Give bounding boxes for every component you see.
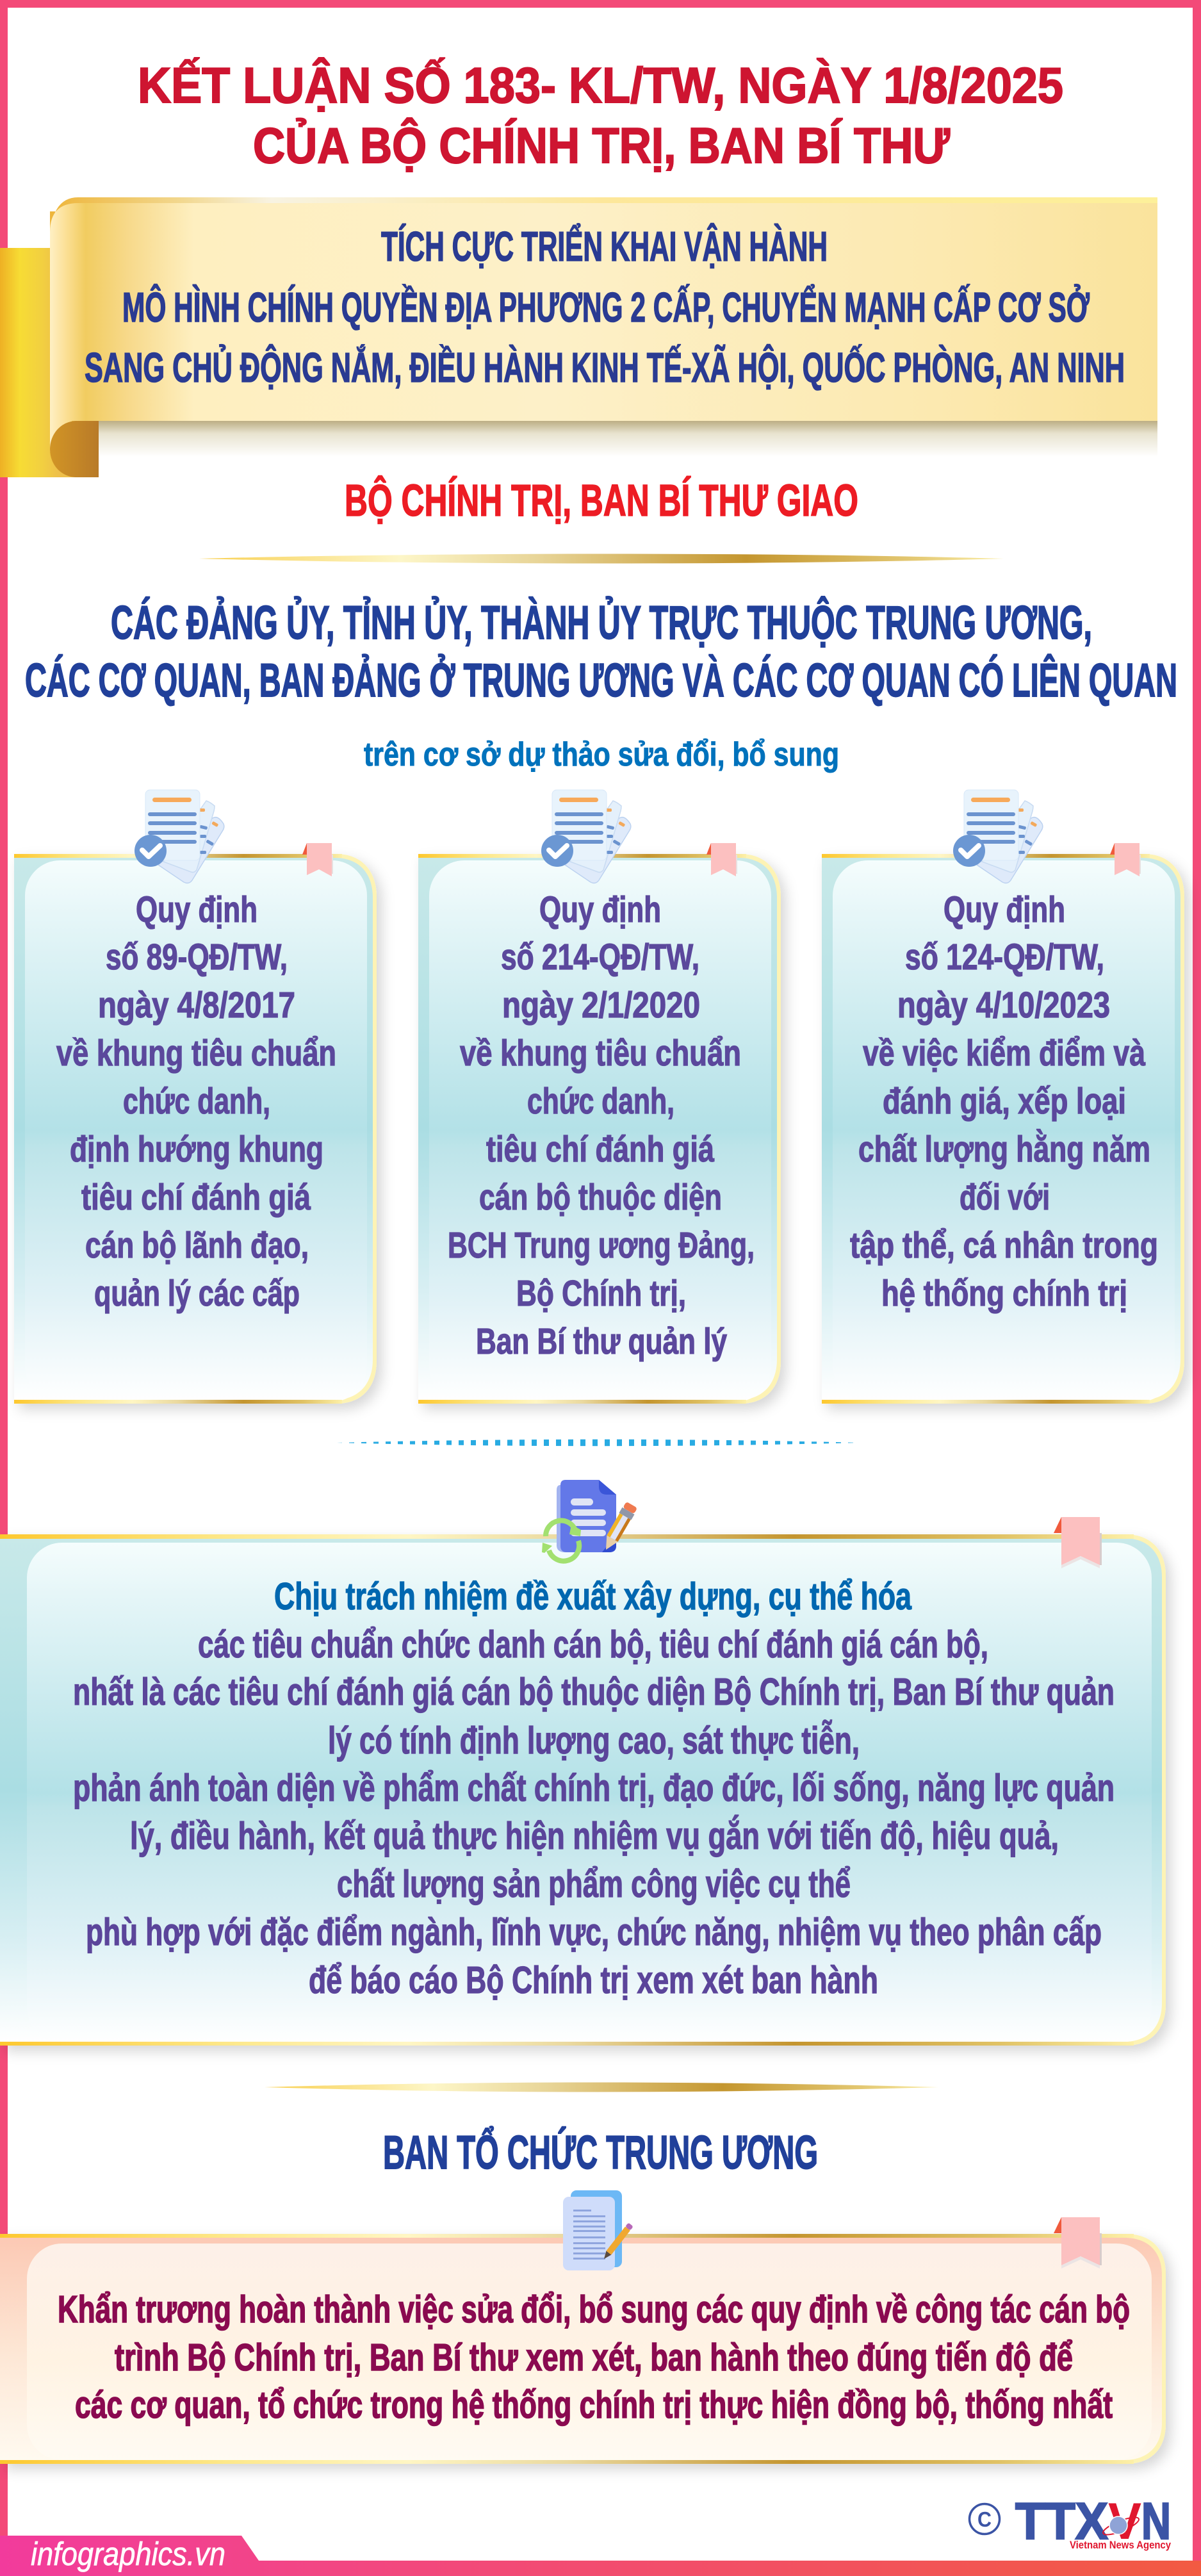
card text: ngày 2/1/2020 [502,985,700,1026]
card text: tiêu chí đánh giá [81,1177,311,1218]
card text: chức danh, [527,1081,674,1122]
panel: gold ribbon banner [0,197,1157,477]
copyright logo [970,2493,1171,2551]
card text: quản lý các cấp [94,1273,300,1314]
panel text: để báo cáo Bộ Chính trị xem xét ban hành [309,1959,878,2001]
card text: số 214-QĐ/TW, [501,937,699,978]
title [138,57,1063,174]
panel text: lý có tính định lượng cao, sát thực tiễn, [328,1719,860,1762]
title: CỦA BỘ CHÍNH TRỊ, BAN BÍ THƯ [253,117,950,174]
icon: documents with check [135,790,224,883]
copyright logo: C [977,2507,992,2531]
icon: bookmark [1110,843,1141,876]
panel: regulation 89 card [14,790,377,1404]
website label: infographics.vn [31,2536,225,2572]
panel: regulation 214 card [418,790,781,1404]
heading: addressees [25,597,1177,707]
card text [448,889,755,1362]
card text: Ban Bí thư quản lý [476,1321,727,1362]
card text [56,889,336,1314]
heading: red subtitle: BỘ CHÍNH TRỊ, BAN BÍ THƯ GIAO [345,475,858,525]
icon: bookmark [707,843,737,876]
card text: chức danh, [123,1081,270,1122]
icon: bookmark [1054,1517,1102,1568]
card text: số 124-QĐ/TW, [905,937,1104,978]
card text: định hướng khung [70,1129,323,1170]
card text: Quy định [944,889,1065,930]
icon: bookmark [302,843,333,876]
ribbon text [85,223,1125,391]
panel: central organization commission tasks [0,2190,1166,2464]
card text: đánh giá, xếp loại [883,1081,1126,1122]
icon: notes with pencil [563,2190,633,2270]
card text: cán bộ lãnh đạo, [85,1225,309,1266]
icon: documents with check [541,790,631,883]
card text: tiêu chí đánh giá [486,1129,714,1170]
TTXVN logo: N [1141,2493,1171,2550]
TTXVN logo: TTX [1015,2493,1108,2550]
card text: số 89-QĐ/TW, [106,937,288,978]
card text: hệ thống chính trị [881,1273,1127,1314]
panel text: chất lượng sản phẩm công việc cụ thể [337,1863,851,1905]
heading: central organization commission: BAN TỔ CHỨC TRUNG ƯƠNG [383,2127,818,2179]
ribbon text: TÍCH CỰC TRIỂN KHAI VẬN HÀNH [381,223,828,270]
icon: document with pencil and refresh arrows [542,1480,638,1561]
TTXVN logo [1015,2493,1171,2551]
card text: BCH Trung ương Đảng, [448,1225,755,1266]
bottom bar with website tab [0,2536,1201,2576]
title: KẾT LUẬN SỐ 183- KL/TW, NGÀY 1/8/2025 [138,57,1063,113]
icon: bookmark [1054,2217,1102,2268]
panel text [73,1575,1115,2001]
subheading: trên cơ sở dự thảo sửa đổi, bổ sung [364,736,839,773]
panel text [58,2288,1130,2426]
panel: regulation 124 card [822,790,1184,1404]
panel text: Chịu trách nhiệm đề xuất xây dựng, cụ thể hóa [274,1575,912,1618]
card text: về khung tiêu chuẩn [56,1033,336,1074]
icon: documents with check [953,790,1043,883]
card text: Quy định [136,889,257,930]
card text: cán bộ thuộc diện [479,1177,722,1218]
card text: ngày 4/10/2023 [897,985,1110,1026]
card text: đối với [960,1177,1050,1218]
card text: ngày 4/8/2017 [98,985,295,1026]
panel: responsibility [0,1480,1166,2046]
card text: Bộ Chính trị, [516,1273,686,1314]
card text [850,889,1158,1314]
card text: về khung tiêu chuẩn [460,1033,741,1074]
card text: Quy định [539,889,661,930]
TTXVN logo: Vietnam News Agency [1070,2539,1171,2551]
TTXVN logo: V [1108,2493,1141,2550]
